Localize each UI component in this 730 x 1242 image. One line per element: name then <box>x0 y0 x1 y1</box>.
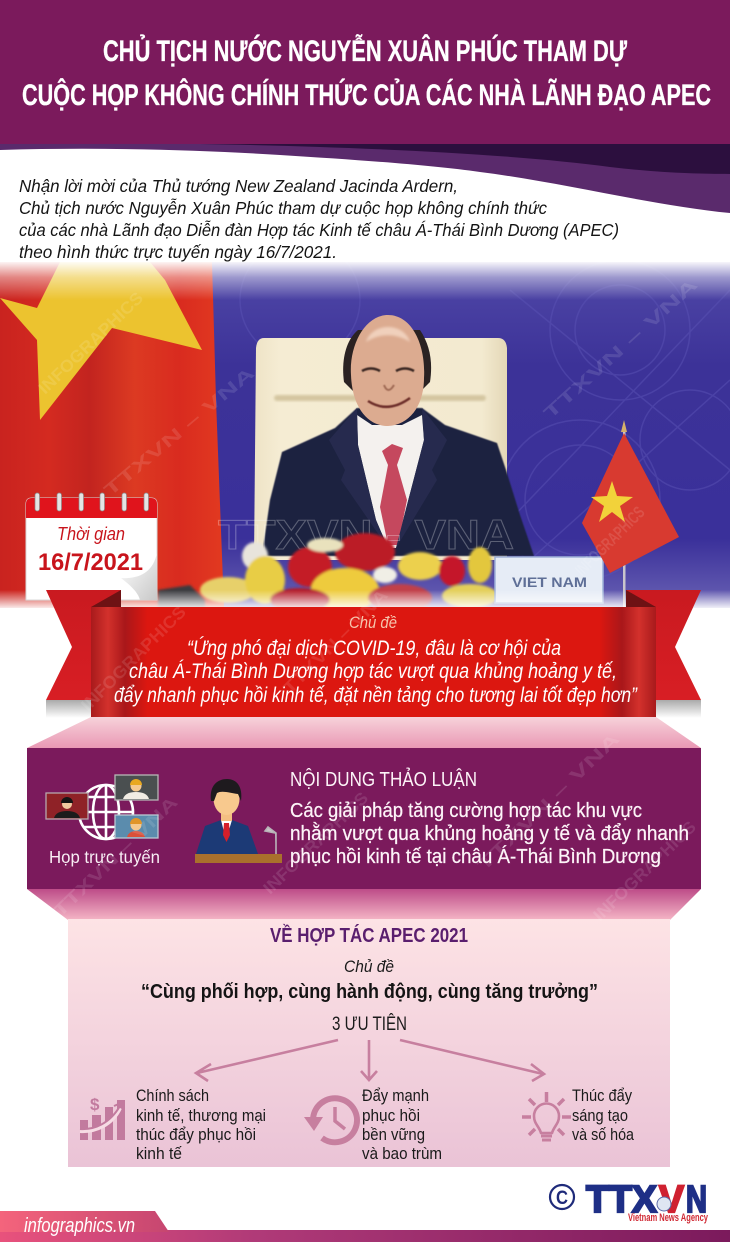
connector trapezoid under panel <box>27 889 701 920</box>
priority 1 text: kinh tế, thương mại <box>136 1106 266 1125</box>
text: discussion content: nhằm vượt qua khủng hoảng y tế và đẩy nhanh <box>290 822 689 845</box>
icon: economic growth chart <box>80 1095 125 1140</box>
watermarks: INFOGRAPHICS <box>571 503 648 580</box>
watermarks: TTXVN – VNA <box>279 585 392 698</box>
priority 3 text <box>572 1086 634 1144</box>
text: discussion content: Các giải pháp tăng cường hợp tác khu vực <box>290 800 642 822</box>
lapels <box>329 408 447 548</box>
priority 2 text <box>362 1086 442 1163</box>
icon: online meeting <box>46 775 160 867</box>
text: discussion content: phục hồi kinh tế tại châu Á-Thái Bình Dương <box>290 845 661 868</box>
priority 1 text: thúc đẩy phục hồi <box>136 1125 256 1144</box>
priority 2 text: Đẩy mạnh <box>362 1086 429 1105</box>
priority 2 text: bền vững <box>362 1125 425 1144</box>
watermarks: TTXVN – VNA <box>100 363 258 500</box>
dark telephone <box>158 585 205 608</box>
icon: economic growth chart: $ <box>90 1095 100 1114</box>
priority 2 text: phục hồi <box>362 1106 420 1125</box>
watermarks: TTXVN – VNA <box>474 729 623 875</box>
suit <box>262 408 534 556</box>
tie <box>380 444 407 545</box>
photo background <box>212 262 730 608</box>
header band <box>0 0 730 300</box>
priority 2 text: và bao trùm <box>362 1144 442 1163</box>
intro text: Nhận lời mời của Thủ tướng New Zealand Jacinda Ardern, <box>19 176 458 196</box>
priority 1 text <box>136 1086 266 1163</box>
name plate: VIET NAM <box>512 574 587 590</box>
face features <box>362 368 414 407</box>
watermark: TTXVN - VNA outline: TTXVN - VNA <box>218 511 514 558</box>
priority 1 text: Chính sách <box>136 1086 209 1105</box>
intro text: Chủ tịch nước Nguyễn Xuân Phúc tham dự cuộc họp không chính thức <box>19 198 547 218</box>
ribbon tails <box>46 590 701 700</box>
panel: about APEC 2021 <box>68 919 670 1167</box>
photo fades <box>0 262 730 608</box>
watermarks: INFOGRAPHICS <box>35 288 147 398</box>
ribbon text: “Ứng phó đại dịch COVID-19, đâu là cơ hội của <box>187 637 561 660</box>
hair <box>343 330 431 392</box>
title <box>22 34 711 112</box>
intro text: theo hình thức trực tuyến ngày 16/7/2021. <box>19 242 337 262</box>
calendar text: 16/7/2021 <box>38 549 143 576</box>
logo: TTXVN <box>550 1179 709 1224</box>
watermarks: TTXVN – VNA <box>50 793 181 921</box>
head <box>351 315 424 426</box>
footer band: infographics.vn <box>24 1215 135 1237</box>
text: discussion content: NỘI DUNG THẢO LUẬN <box>290 768 477 791</box>
shirt <box>357 415 424 548</box>
flower arrangement <box>200 533 498 612</box>
footer band <box>0 1211 730 1242</box>
calendar text: Thời gian <box>57 524 125 544</box>
name plate <box>495 557 603 603</box>
red ribbon: theme <box>46 590 701 718</box>
logo: TTXVN: N <box>686 1179 707 1221</box>
photo: president at the virtual meeting <box>0 240 730 612</box>
logo: TTXVN: TTX <box>586 1179 658 1221</box>
heading: VỀ HỢP TÁC APEC 2021 <box>270 924 468 947</box>
person <box>262 315 534 556</box>
watermarks: INFOGRAPHICS <box>590 817 700 925</box>
text: discussion content <box>290 768 689 868</box>
theme quote: “Cùng phối hợp, cùng hành động, cùng tăng trưởng” <box>141 981 598 1003</box>
calendar: time <box>26 493 157 600</box>
priorities label: 3 ƯU TIÊN <box>332 1013 407 1035</box>
panel: discussion content <box>27 748 701 889</box>
arrows <box>196 1040 544 1081</box>
ribbon main <box>91 607 656 717</box>
logo: TTXVN: V <box>659 1179 685 1221</box>
chair <box>254 338 507 560</box>
watermarks <box>35 275 701 925</box>
ribbon tail shadows <box>46 700 701 718</box>
connector trapezoid under ribbon <box>27 717 701 748</box>
ribbon text: Chủ đề <box>349 614 397 632</box>
theme label: Chủ đề <box>344 957 394 976</box>
ribbon text: châu Á-Thái Bình Dương hợp tác vượt qua khủng hoảng y tế, <box>129 660 617 683</box>
table flag <box>582 420 679 608</box>
icon: speaker at podium <box>195 779 282 863</box>
watermarks: INFOGRAPHICS <box>77 602 190 715</box>
priority 3 text: sáng tạo <box>572 1106 628 1125</box>
priority 3 text: và số hóa <box>572 1125 634 1144</box>
icon: online meeting: Họp trực tuyến <box>49 847 160 867</box>
logo: TTXVN: C <box>556 1188 568 1209</box>
ribbon text: đẩy nhanh phục hồi kinh tế, đặt nền tảng cho tương lai tốt đẹp hơn” <box>114 684 638 707</box>
national flag backdrop <box>0 262 224 608</box>
watermarks: INFOGRAPHICS <box>260 788 372 898</box>
calendar rings <box>35 493 148 511</box>
icon: light bulb <box>522 1092 571 1140</box>
intro text: của các nhà Lãnh đạo Diễn đàn Hợp tác Kinh tế châu Á-Thái Bình Dương (APEC) <box>19 220 619 240</box>
watermarks: TTXVN – VNA <box>540 275 701 423</box>
calendar text <box>38 524 143 576</box>
ribbon text <box>114 614 638 707</box>
icon: clock history <box>304 1098 357 1142</box>
intro text <box>19 176 619 262</box>
priority 1 text: kinh tế <box>136 1144 182 1163</box>
priority 3 text: Thúc đẩy <box>572 1086 632 1105</box>
